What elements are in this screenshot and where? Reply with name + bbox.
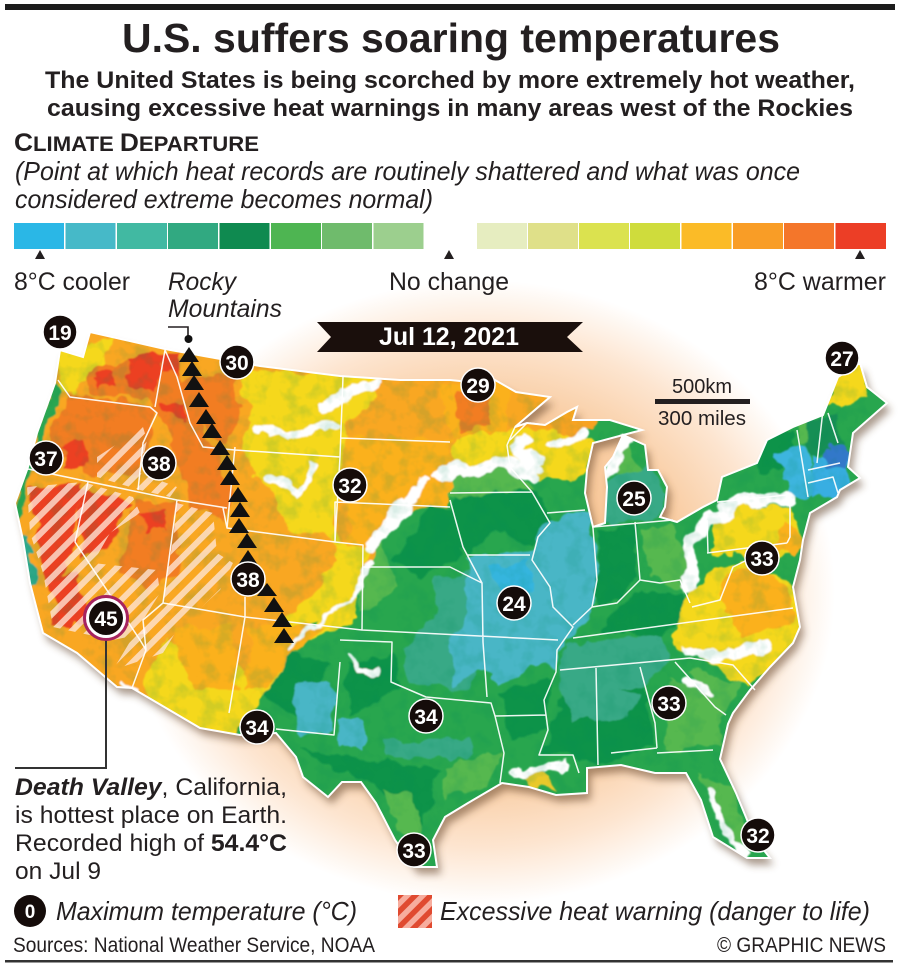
subtitle: [45, 67, 855, 122]
Death Valley leader line: [15, 640, 106, 768]
temperature markers: 33: [750, 548, 774, 571]
date banner: [317, 322, 583, 352]
scale labels: 8°C warmer: [754, 268, 886, 296]
colour scale bar: [14, 223, 886, 249]
temperature markers: 38: [236, 569, 260, 592]
legend: maximum temperature: Maximum temperature (°C): [56, 896, 357, 926]
legend heading: climate departure: CLIMATE DEPARTURE: [14, 129, 259, 157]
legend: maximum temperature: 0: [25, 902, 35, 923]
temperature markers: 29: [466, 375, 490, 398]
temperature markers: 33: [657, 693, 681, 716]
temperature markers: 37: [34, 448, 58, 471]
Death Valley callout: Recorded high of 54.4°C: [15, 830, 287, 857]
temperature markers: 32: [746, 825, 770, 848]
scale labels: [14, 250, 886, 296]
map glow background: [125, 280, 835, 904]
map scale: 500km: [672, 376, 732, 398]
legend: excessive heat warning: Excessive heat warning (danger to life): [440, 896, 870, 926]
label: Rocky Mountains with leader: Mountains: [168, 295, 282, 323]
Death Valley callout: is hottest place on Earth.: [15, 802, 287, 829]
scale labels: 8°C cooler: [14, 268, 130, 296]
bottom rule: [5, 960, 893, 962]
temperature markers: 45: [94, 608, 118, 631]
temperature markers: 38: [147, 453, 171, 476]
temperature markers: 32: [338, 475, 362, 498]
subtitle: causing excessive heat warnings in many areas west of the Rockies: [47, 95, 853, 122]
heat warning hatching: [27, 427, 233, 670]
map outline and state borders: [15, 332, 887, 867]
temperature markers: [29, 315, 859, 867]
temperature markers: 34: [414, 706, 438, 729]
mountain range markers: Rocky Mountains: [179, 347, 294, 643]
temperature markers: 27: [830, 348, 854, 371]
label: Rocky Mountains with leader: [168, 268, 282, 343]
legend description: considered extreme becomes normal): [15, 184, 433, 214]
Death Valley callout: [15, 774, 287, 885]
credit: © GRAPHIC NEWS: [717, 934, 886, 957]
legend description: [15, 156, 800, 214]
temperature markers: 25: [622, 488, 646, 511]
sources: Sources: National Weather Service, NOAA: [13, 934, 375, 957]
Death Valley callout: on Jul 9: [15, 858, 101, 885]
legend description: (Point at which heat records are routinely shattered and what was once: [15, 156, 800, 186]
temperature map of the US: [16, 333, 886, 866]
temperature markers: 30: [225, 352, 249, 375]
temperature markers: 34: [245, 717, 269, 740]
scale labels: No change: [389, 268, 509, 296]
label: Rocky Mountains with leader: Rocky: [168, 268, 237, 296]
title: U.S. suffers soaring temperatures: [122, 15, 780, 61]
map scale: [655, 376, 750, 430]
map scale: 300 miles: [658, 408, 746, 430]
map shadow: [19, 339, 891, 874]
subtitle: The United States is being scorched by more extremely hot weather,: [45, 67, 855, 94]
temperature markers: 33: [402, 840, 426, 863]
Death Valley callout: Death Valley, California,: [15, 774, 287, 801]
temperature markers: 19: [48, 322, 72, 345]
top rule: [5, 4, 895, 10]
temperature markers: 24: [502, 593, 526, 616]
date banner: Jul 12, 2021: [379, 323, 519, 351]
